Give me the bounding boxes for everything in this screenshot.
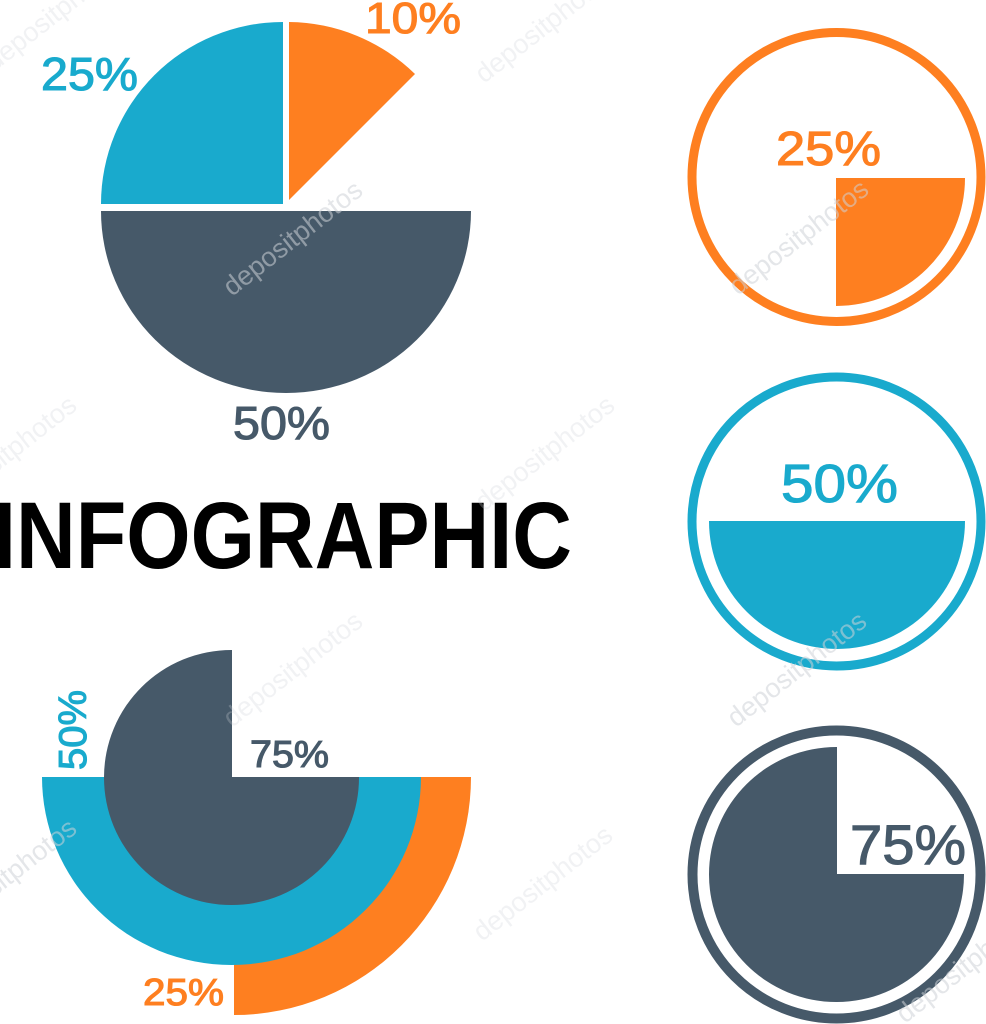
chart: nested arcs [42, 650, 471, 1015]
chart: exploded pie [41, 0, 471, 449]
slice: orange 10% [289, 22, 415, 200]
arc: blue 50% [42, 777, 421, 965]
label: 75%: 75% [250, 734, 329, 776]
quarter fill [836, 178, 965, 306]
label: 25%: 25% [41, 48, 138, 100]
label: 50%: 50% [233, 397, 330, 449]
label: 50% rotated: 50% [52, 690, 95, 770]
ring [692, 730, 980, 1018]
slice: slate 50% [101, 211, 471, 393]
label: 25%: 25% [776, 123, 881, 176]
gauge: blue 50% [692, 377, 981, 666]
ring [692, 32, 981, 322]
half fill [709, 521, 965, 649]
watermarks: depositphotos [217, 175, 368, 302]
three-quarter fill [709, 747, 964, 1002]
watermarks: depositphotos [217, 606, 368, 733]
watermarks: depositphotos [467, 820, 618, 947]
watermarks: depositphotos [721, 606, 872, 733]
pie: slate 75% [104, 650, 359, 905]
arc: orange 25% [234, 777, 471, 1015]
slice: blue 25% [101, 22, 283, 204]
label: 25%: 25% [143, 972, 224, 1014]
label: 75%: 75% [850, 813, 966, 876]
title: INFOGRAPHIC [0, 483, 572, 589]
gauge: slate 75% [692, 730, 980, 1018]
ring [692, 377, 981, 666]
watermarks: depositphotos [723, 174, 874, 301]
watermarks: depositphotos [469, 390, 620, 517]
gauge: orange 25% [692, 32, 981, 322]
label: 50%: 50% [781, 454, 898, 514]
